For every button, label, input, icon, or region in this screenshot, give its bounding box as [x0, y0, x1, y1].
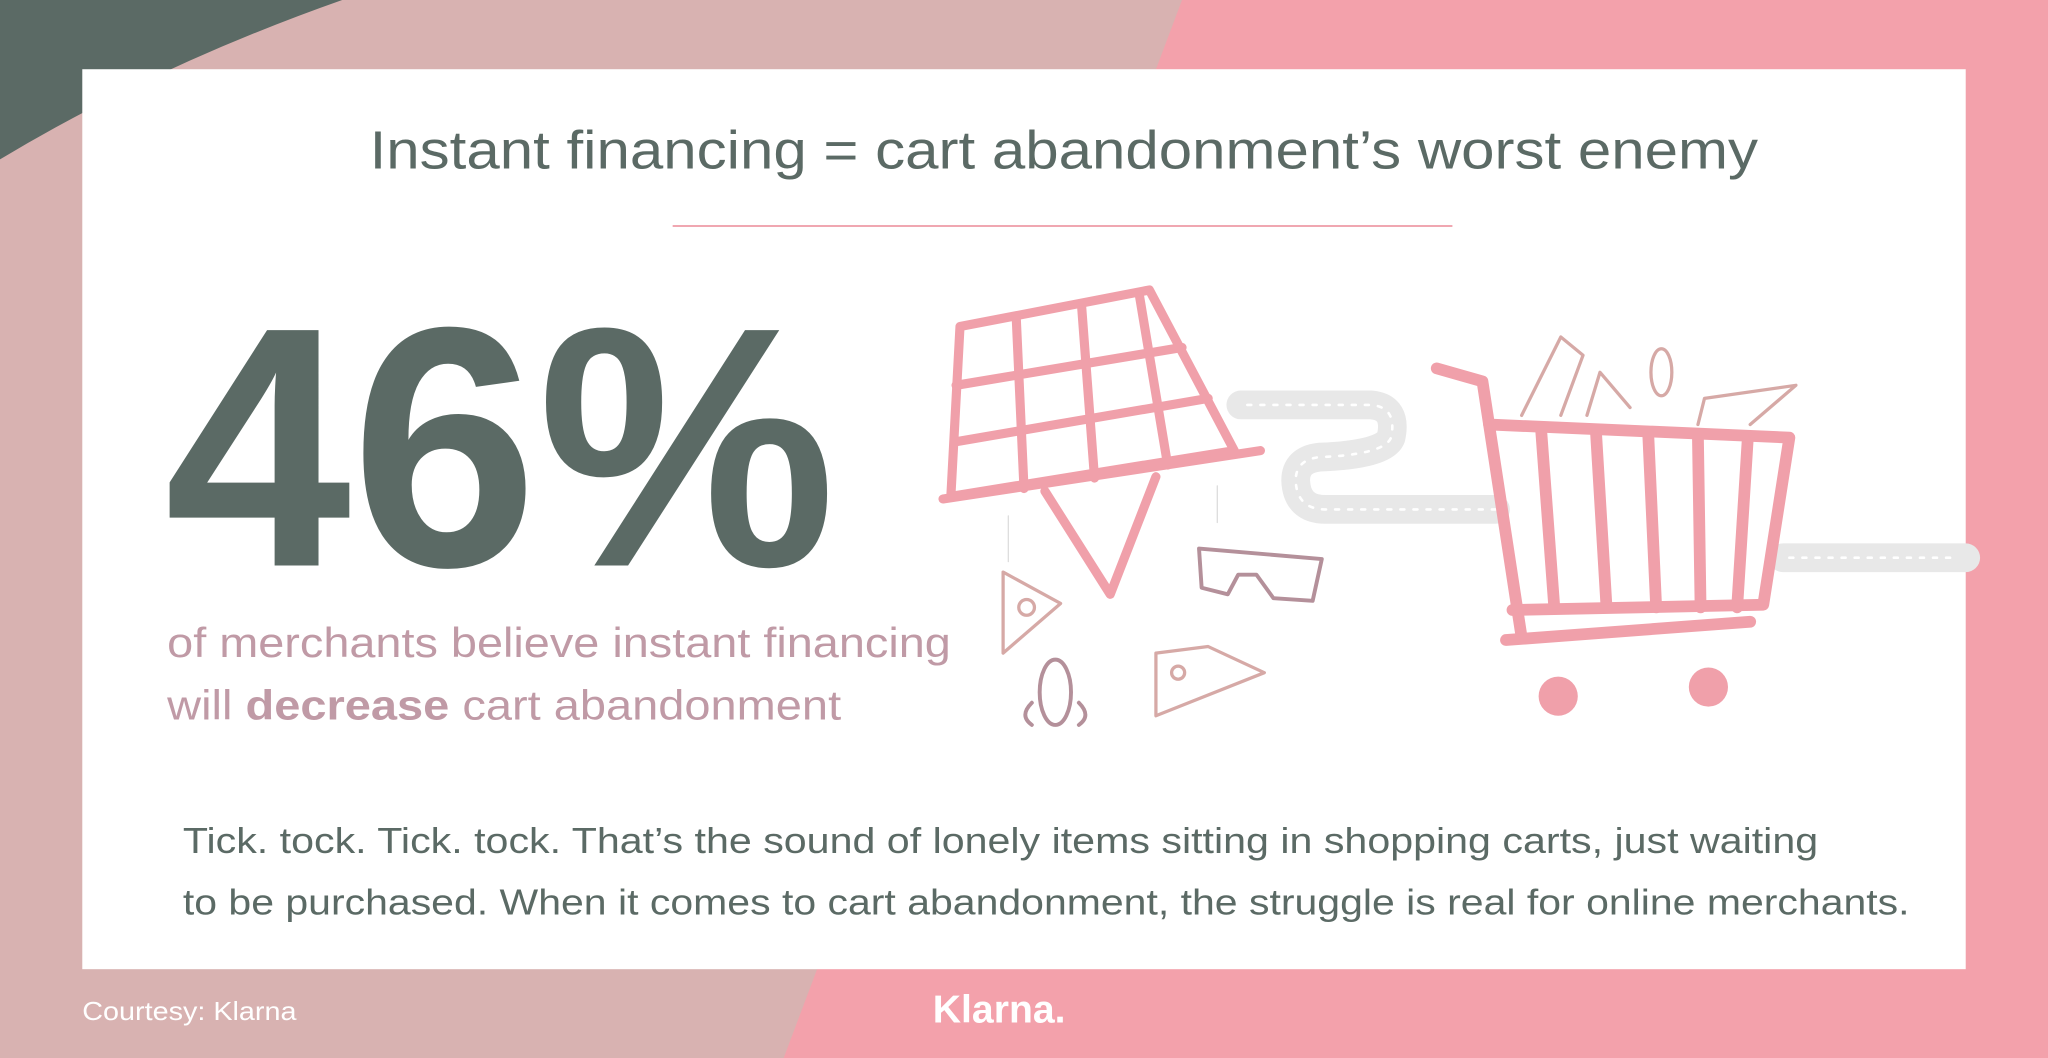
big stat: 46% — [165, 256, 836, 639]
flipped cart — [943, 290, 1260, 594]
body text: to be purchased. When it comes to cart abandonment, the struggle is real for online merchants. — [183, 881, 1910, 922]
white panel — [82, 69, 1966, 969]
title: Instant financing = cart abandonment’s worst enemy — [370, 121, 1758, 180]
body text: Tick. tock. Tick. tock. That’s the sound of lonely items sitting in shopping carts, just waiting — [183, 820, 1818, 861]
stat description: will decrease cart abandonment — [166, 682, 842, 729]
cart — [1437, 368, 1789, 640]
body text — [183, 820, 1910, 922]
stat description: of merchants believe instant financing — [167, 619, 951, 666]
illustration — [943, 290, 1966, 725]
stat description — [166, 619, 951, 729]
background: pink right — [784, 0, 2048, 1058]
background: dark corner — [0, 0, 342, 159]
footer: courtesy: Courtesy: Klarna — [82, 996, 297, 1026]
falling items — [1003, 572, 1264, 716]
footer: logo: Klarna. — [933, 989, 1066, 1032]
road — [1241, 405, 1966, 558]
